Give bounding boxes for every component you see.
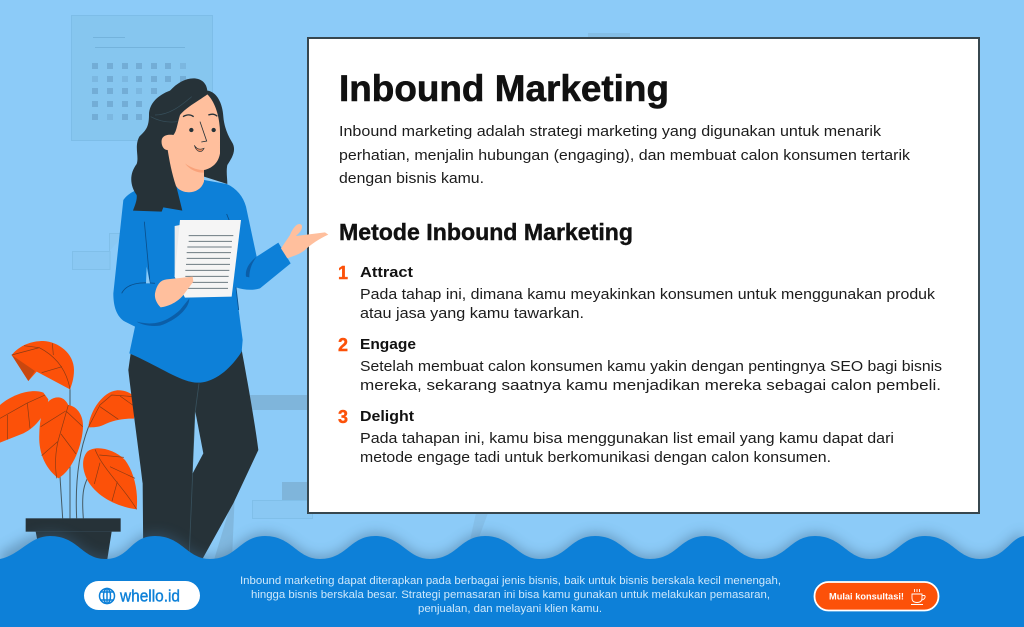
wall calendar xyxy=(72,16,212,140)
panel: main card xyxy=(308,38,979,513)
character: woman presenting xyxy=(113,78,291,563)
step 2: engage xyxy=(338,335,942,394)
icon: coffee cup xyxy=(911,589,925,604)
intro paragraph: dengan bisnis kamu. xyxy=(339,170,484,187)
logo text: whello.id xyxy=(119,588,180,606)
step 1: attract: atau jasa yang kamu tawarkan. xyxy=(360,306,584,322)
step 2: engage: Setelah membuat calon konsumen kamu yakin dengan pentingnya SEO bagi bisnis xyxy=(360,359,942,375)
title: Inbound Marketing xyxy=(339,68,669,109)
plant pot xyxy=(26,518,121,563)
step 3: delight: Pada tahapan ini, kamu bisa menggunakan list email yang kamu dapat dari xyxy=(360,431,894,447)
background table xyxy=(214,33,630,560)
open hand xyxy=(281,224,328,258)
step 3: delight: Delight xyxy=(360,409,414,425)
step 3: delight: metode engage tadi untuk berkomunikasi dengan calon konsumen. xyxy=(360,450,831,466)
footer band xyxy=(0,536,1024,627)
document xyxy=(175,220,241,298)
icon: globe xyxy=(100,588,114,604)
leaf right lower xyxy=(83,448,137,509)
section heading: Metode Inbound Marketing xyxy=(339,219,633,245)
footer text: hingga bisnis berskala besar. Strategi pemasaran ini bisa kamu gunakan untuk melakukan pemasaran, xyxy=(251,589,770,601)
hair xyxy=(131,78,234,212)
facial features xyxy=(183,114,217,152)
button: mulai konsultasi xyxy=(814,582,938,610)
intro paragraph: perhatian, menjalin hubungan (engaging), dan membuat calon konsumen tertarik xyxy=(339,147,911,164)
footer text: penjualan, dan melayani klien kamu. xyxy=(418,603,602,615)
step 1: attract xyxy=(338,263,936,322)
step 1: attract: Attract xyxy=(360,265,413,281)
background decorations xyxy=(72,16,630,560)
step 1: attract: Pada tahap ini, dimana kamu meyakinkan konsumen untuk menggunakan produk xyxy=(360,287,936,303)
footer text: Inbound marketing dapat diterapkan pada berbagai jenis bisnis, baik untuk bisnis berskala kecil menengah, xyxy=(240,575,781,587)
footer wave shadow xyxy=(0,533,1024,600)
plant stems xyxy=(60,389,97,518)
intro paragraph: Inbound marketing adalah strategi marketing yang digunakan untuk menarik xyxy=(339,123,882,140)
step 3: delight xyxy=(338,407,894,466)
logo pill xyxy=(84,581,200,610)
face and neck xyxy=(162,94,220,192)
footer text xyxy=(240,575,781,615)
sweater xyxy=(113,180,291,383)
sleeve shadow xyxy=(137,298,189,326)
leaf top xyxy=(12,341,74,389)
plant xyxy=(0,341,137,563)
faint steps left xyxy=(72,234,125,270)
holding hand xyxy=(155,277,193,307)
leaf right upper xyxy=(88,390,134,427)
step 1: attract: 1 xyxy=(338,263,348,283)
leaf center xyxy=(39,397,83,478)
step 3: delight: 3 xyxy=(338,407,348,427)
button: mulai konsultasi: Mulai konsultasi! xyxy=(829,592,904,602)
step 2: engage: mereka, sekarang saatnya kamu menjadikan mereka sebagai calon pembeli. xyxy=(360,378,941,394)
intro paragraph xyxy=(339,123,911,187)
step 2: engage: 2 xyxy=(338,335,348,355)
leaf left xyxy=(0,391,48,443)
step 2: engage: Engage xyxy=(360,337,416,353)
legs xyxy=(128,350,258,563)
